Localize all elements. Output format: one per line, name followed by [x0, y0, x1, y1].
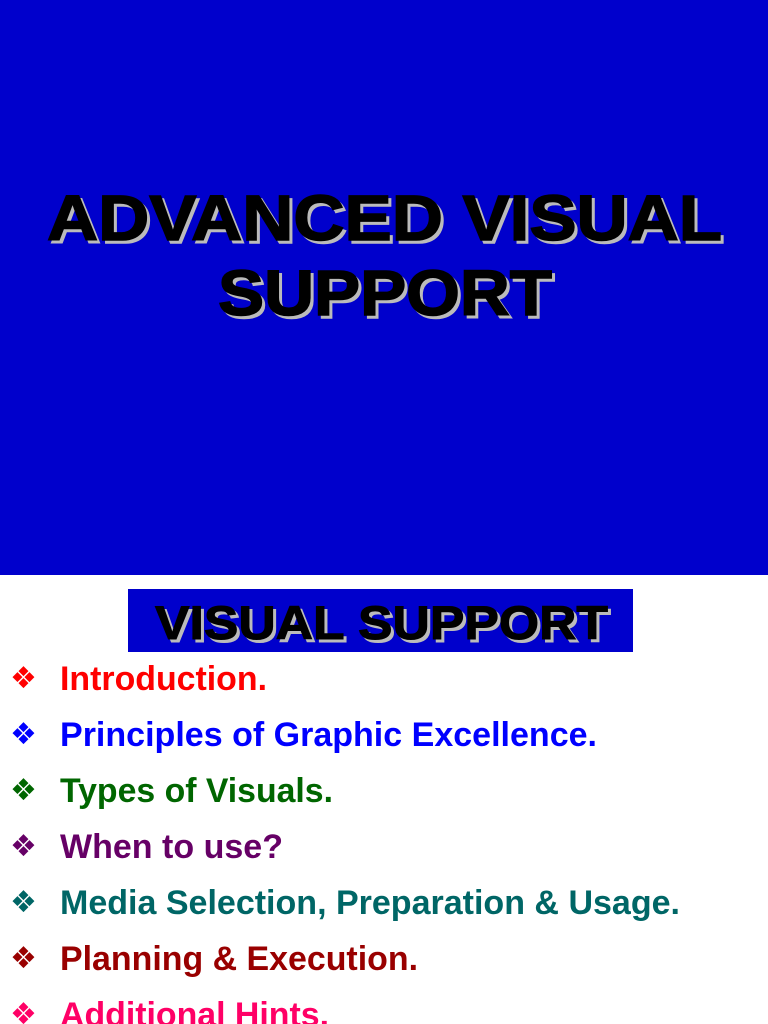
title: SUPPORT	[221, 260, 555, 332]
bullet: planning: Planning & Execution.	[60, 940, 418, 978]
title: SUPPORT	[218, 257, 552, 329]
heading box: visual support	[128, 589, 633, 652]
bullet: principles: ❖	[10, 717, 37, 752]
heading box: visual support: VISUAL SUPPORT	[155, 596, 608, 649]
bullet: media: Media Selection, Preparation & Usage.	[60, 884, 680, 922]
title: ADVANCED VISUAL	[50, 185, 725, 257]
heading box: visual support: VISUAL SUPPORT	[158, 599, 611, 652]
bullet: when: ❖	[10, 829, 37, 864]
bullet: media: ❖	[10, 885, 37, 920]
bullet: planning: ❖	[10, 941, 37, 976]
panel: title background	[0, 0, 768, 575]
title: ADVANCED VISUAL	[47, 182, 722, 254]
bullet list	[10, 660, 680, 1024]
bullet: introduction: ❖	[10, 661, 37, 696]
bullet: types: Types of Visuals.	[60, 772, 333, 810]
bullet: types: ❖	[10, 773, 37, 808]
bullet: introduction: Introduction.	[60, 660, 267, 698]
title	[47, 182, 725, 332]
bullet: when: When to use?	[60, 828, 283, 866]
bullet: principles: Principles of Graphic Excellence.	[60, 716, 597, 754]
